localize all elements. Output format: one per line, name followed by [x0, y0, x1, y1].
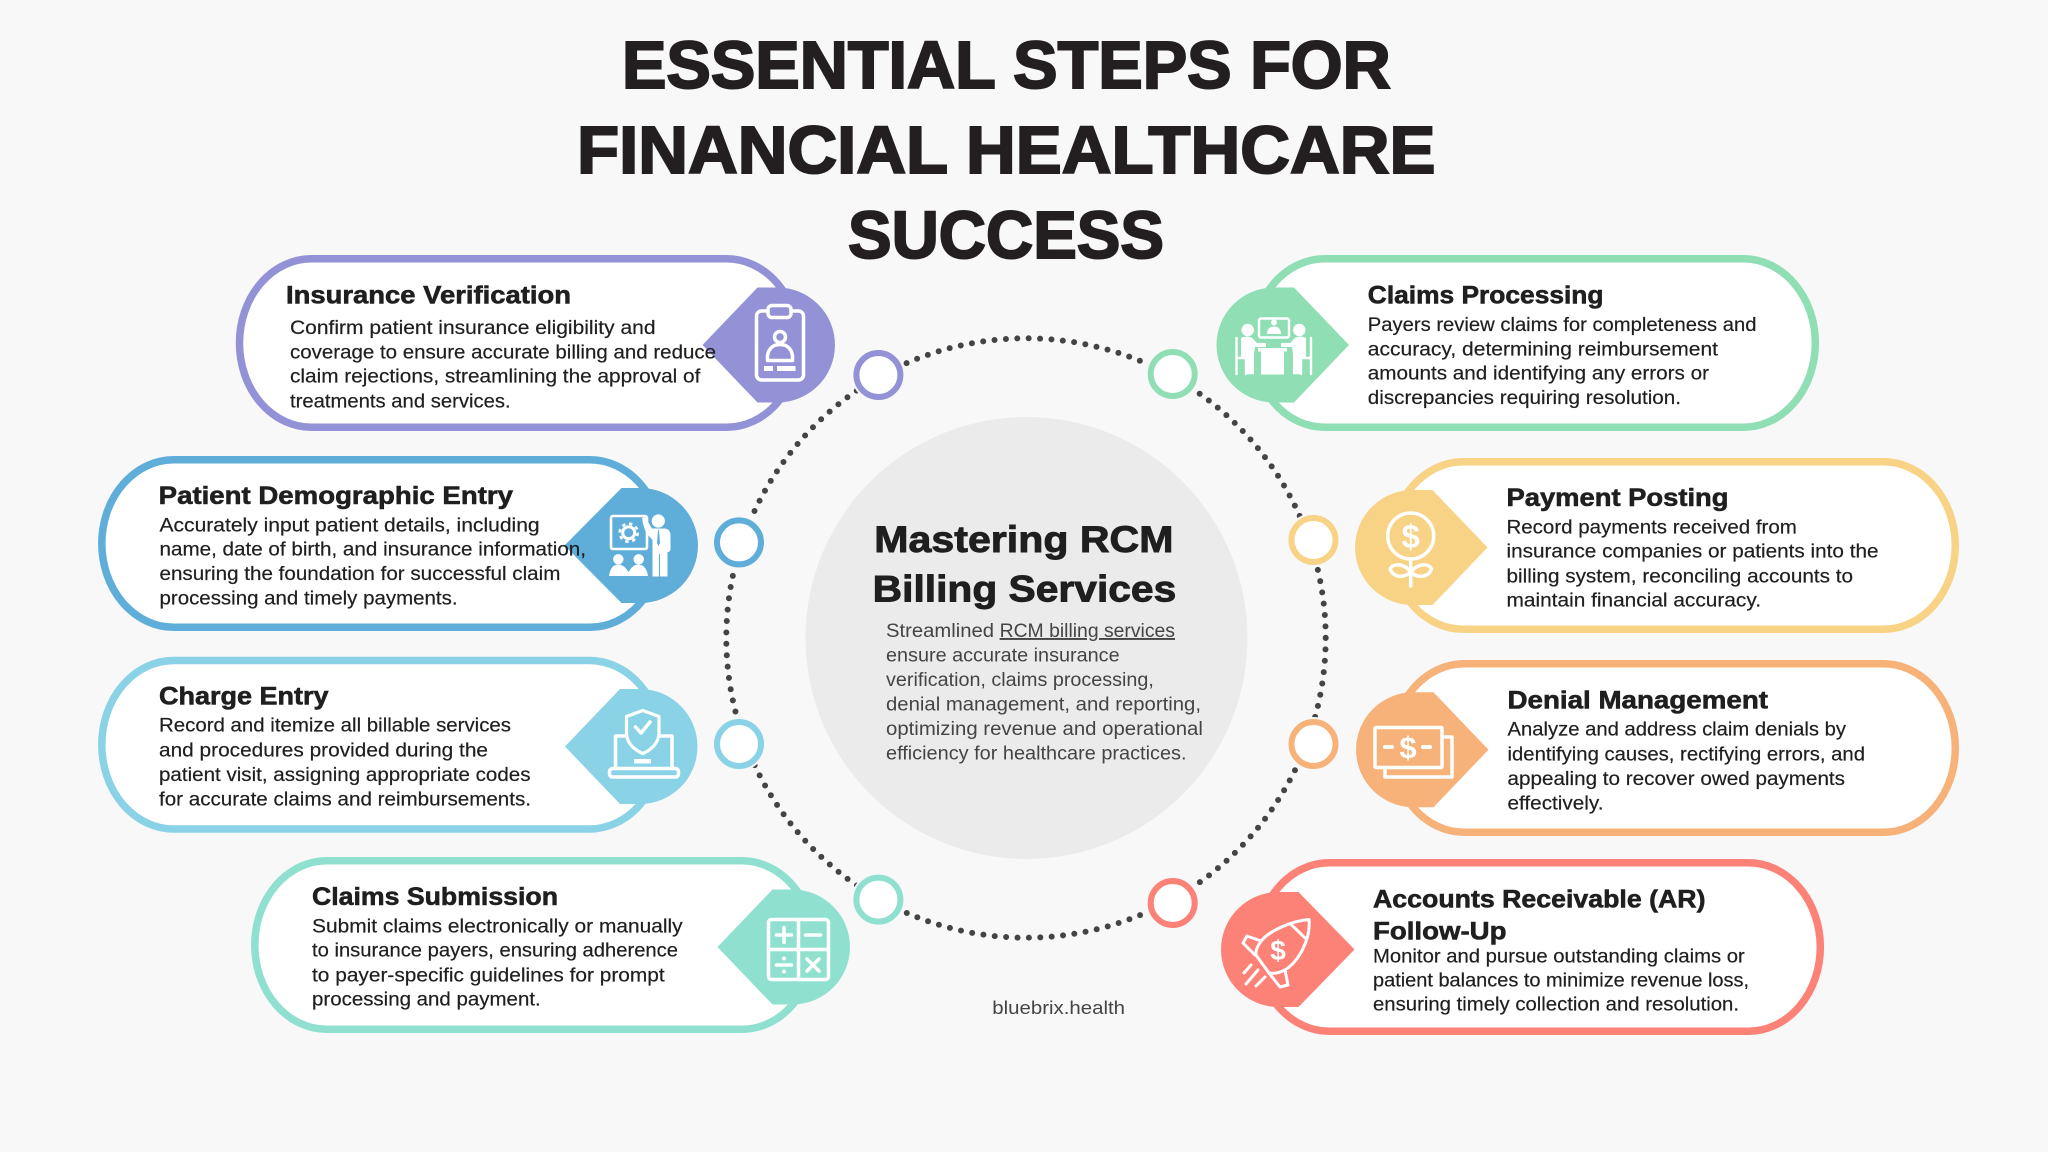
- description: treatments and services.: [290, 391, 511, 412]
- panel: insurance verification: [240, 259, 835, 427]
- description: [1508, 720, 1865, 814]
- central description: Streamlined: [886, 621, 994, 642]
- heading: Patient Demographic Entry: [159, 482, 513, 510]
- node: denial management: [1286, 717, 1340, 771]
- description: Analyze and address claim denials by: [1508, 720, 1847, 741]
- description: appealing to recover owed payments: [1508, 769, 1845, 790]
- icon: money plant: [1355, 490, 1488, 605]
- heading: Insurance Verification: [286, 281, 571, 309]
- panel: payment posting: [1355, 462, 1955, 629]
- description: insurance companies or patients into the: [1506, 542, 1878, 563]
- description: ensuring the foundation for successful claim: [160, 564, 560, 585]
- description: [160, 516, 586, 610]
- central description: ensure accurate insurance: [886, 646, 1120, 667]
- description: Submit claims electronically or manually: [312, 916, 683, 937]
- heading: Denial Management: [1508, 686, 1769, 714]
- description: discrepancies requiring resolution.: [1368, 388, 1681, 409]
- node: claims submission: [851, 873, 905, 927]
- node: payment posting: [1286, 513, 1340, 567]
- description: processing and payment.: [312, 990, 541, 1011]
- icon: presenter with audience: [564, 488, 698, 603]
- heading: Claims Submission: [312, 883, 558, 911]
- description: Confirm patient insurance eligibility and: [290, 318, 656, 339]
- description: [1506, 517, 1878, 612]
- node: insurance verification: [851, 348, 905, 402]
- panel: claims submission: [255, 861, 850, 1029]
- central description: [886, 621, 1203, 765]
- icon: meeting at table: [1217, 288, 1349, 402]
- node: charge entry: [712, 717, 766, 771]
- description: to insurance payers, ensuring adherence: [312, 941, 678, 962]
- title: FINANCIAL HEALTHCARE: [577, 114, 1435, 188]
- description: ensuring timely collection and resolution.: [1373, 995, 1739, 1016]
- panel: patient demographic entry: [102, 460, 698, 627]
- central description: RCM billing services: [1000, 621, 1175, 642]
- description: patient visit, assigning appropriate codes: [159, 765, 530, 786]
- description: Accurately input patient details, including: [160, 516, 540, 537]
- central disc: [806, 417, 1248, 859]
- icon: dollar rocket: $: [1270, 935, 1286, 966]
- description: Payers review claims for completeness and: [1368, 315, 1757, 336]
- description: [312, 916, 683, 1011]
- icon: calculator keys: [718, 890, 850, 1004]
- icon: id badge clipboard: [702, 288, 835, 402]
- heading: Claims Processing: [1368, 281, 1604, 309]
- heading: [1373, 886, 1706, 945]
- description: maintain financial accuracy.: [1506, 591, 1761, 612]
- description: amounts and identifying any errors or: [1368, 364, 1710, 385]
- node: accounts receivable: [1146, 876, 1200, 930]
- description: effectively.: [1508, 793, 1604, 814]
- description: to payer-specific guidelines for prompt: [312, 965, 665, 986]
- icon: shield over laptop: [565, 689, 697, 804]
- description: name, date of birth, and insurance information,: [160, 540, 586, 561]
- central heading: [873, 519, 1176, 610]
- central description: efficiency for healthcare practices.: [886, 744, 1186, 765]
- title: SUCCESS: [848, 199, 1164, 273]
- panel: denial management: [1356, 664, 1955, 832]
- node: claims processing: [1146, 347, 1200, 401]
- description: [1373, 947, 1749, 1016]
- central description: optimizing revenue and operational: [886, 719, 1203, 740]
- dotted ring: [726, 338, 1326, 938]
- description: for accurate claims and reimbursements.: [159, 789, 531, 810]
- ring nodes: [712, 347, 1340, 930]
- source credit: bluebrix.health: [992, 997, 1125, 1018]
- description: claim rejections, streamlining the approval of: [290, 367, 701, 388]
- description: identifying causes, rectifying errors, and: [1508, 744, 1865, 765]
- description: and procedures provided during the: [159, 740, 488, 761]
- description: patient balances to minimize revenue loss,: [1373, 971, 1749, 992]
- description: Monitor and pursue outstanding claims or: [1373, 947, 1746, 968]
- heading: Payment Posting: [1506, 484, 1728, 512]
- description: [159, 716, 531, 810]
- icon: money plant: $: [1402, 518, 1420, 555]
- description: [1368, 315, 1757, 409]
- description: billing system, reconciling accounts to: [1506, 566, 1853, 587]
- panel: claims processing: [1217, 259, 1815, 427]
- central heading: Billing Services: [873, 569, 1176, 610]
- panel: charge entry: [102, 660, 697, 829]
- icon: banknotes: [1356, 692, 1488, 807]
- description: processing and timely payments.: [160, 589, 458, 610]
- description: Record and itemize all billable services: [159, 716, 511, 737]
- icon: dollar rocket: [1221, 892, 1354, 1007]
- heading: Charge Entry: [159, 682, 329, 710]
- central description: denial management, and reporting,: [886, 695, 1201, 716]
- title: [577, 29, 1435, 273]
- panel: accounts receivable follow-up: [1221, 863, 1820, 1031]
- description: Record payments received from: [1506, 517, 1797, 538]
- title: ESSENTIAL STEPS FOR: [622, 29, 1391, 103]
- heading: Accounts Receivable (AR): [1373, 886, 1706, 914]
- description: accuracy, determining reimbursement: [1368, 339, 1719, 360]
- description: coverage to ensure accurate billing and reduce: [290, 342, 716, 363]
- central heading: Mastering RCM: [874, 519, 1174, 560]
- central description: verification, claims processing,: [886, 670, 1154, 691]
- description: [290, 318, 716, 412]
- node: patient demographic entry: [712, 515, 766, 569]
- icon: banknotes: $: [1399, 730, 1417, 765]
- heading: Follow-Up: [1373, 917, 1506, 945]
- central text block: [873, 519, 1203, 765]
